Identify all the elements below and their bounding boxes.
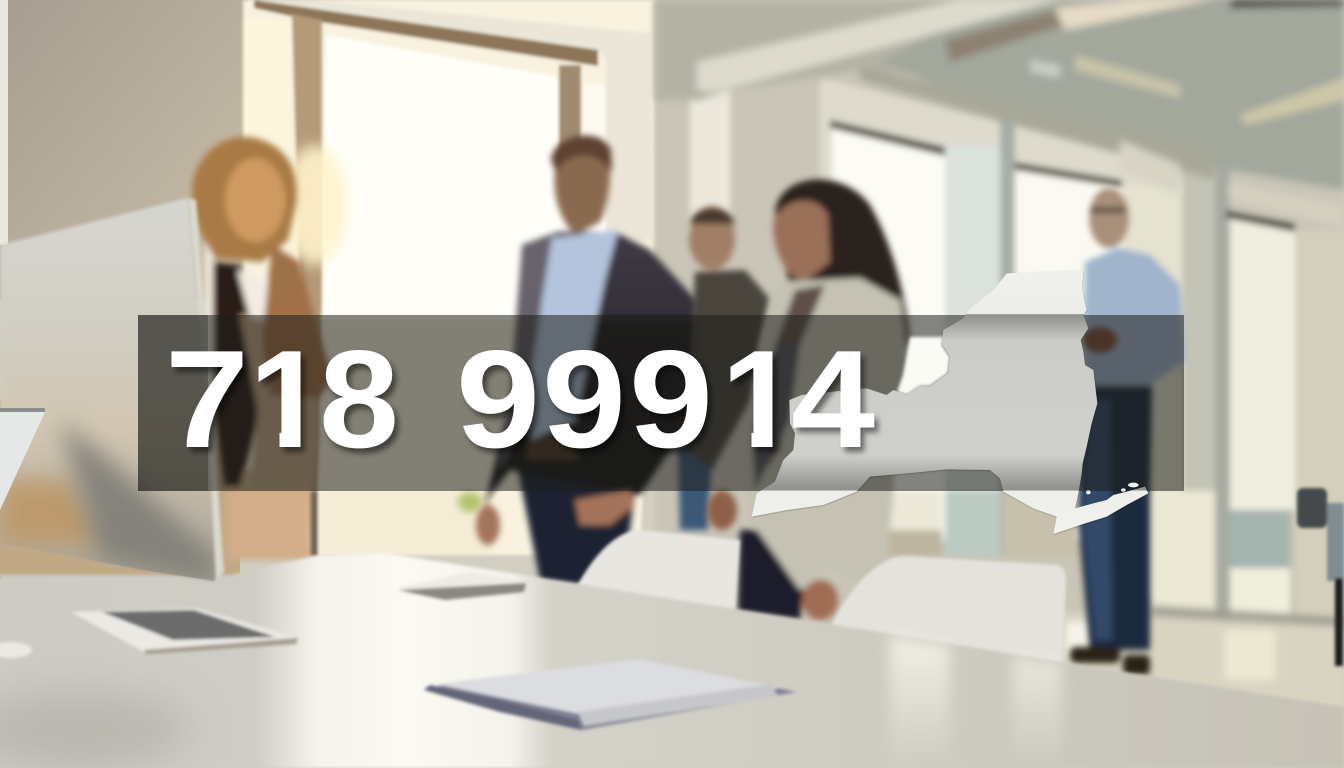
window left [243, 0, 655, 556]
warm glow [283, 145, 347, 265]
phone number: 1 [721, 322, 798, 477]
phone number [172, 350, 882, 456]
table [0, 553, 1344, 768]
floor right [1060, 606, 1344, 710]
phone number: 9 [629, 322, 713, 477]
left wall [0, 0, 248, 300]
person: woman with dark hair [707, 180, 910, 620]
phone number: 9 [456, 322, 540, 477]
plant [458, 492, 482, 512]
person: woman at left [192, 137, 333, 560]
phone number: 9 [542, 322, 626, 477]
number bar [138, 315, 1184, 491]
mouse [0, 642, 32, 658]
lake cut-out beside the map [897, 337, 950, 395]
monitor [0, 198, 224, 585]
phone number: 8 [319, 322, 399, 477]
keyboard [71, 608, 298, 654]
ceiling and glass [655, 0, 1344, 228]
person: distant man [678, 206, 769, 530]
right interior wall [655, 0, 1344, 640]
phone number: 1 [249, 322, 326, 477]
distant tablet [398, 572, 526, 600]
phone number: 4 [791, 322, 875, 477]
person: man at far right [1070, 188, 1186, 675]
notebook on table [424, 659, 796, 730]
phone number: 7 [165, 322, 249, 477]
far chair [1297, 488, 1344, 666]
map of New York State [752, 270, 1148, 534]
chairs [575, 530, 1066, 664]
person: man in blazer [476, 136, 696, 585]
